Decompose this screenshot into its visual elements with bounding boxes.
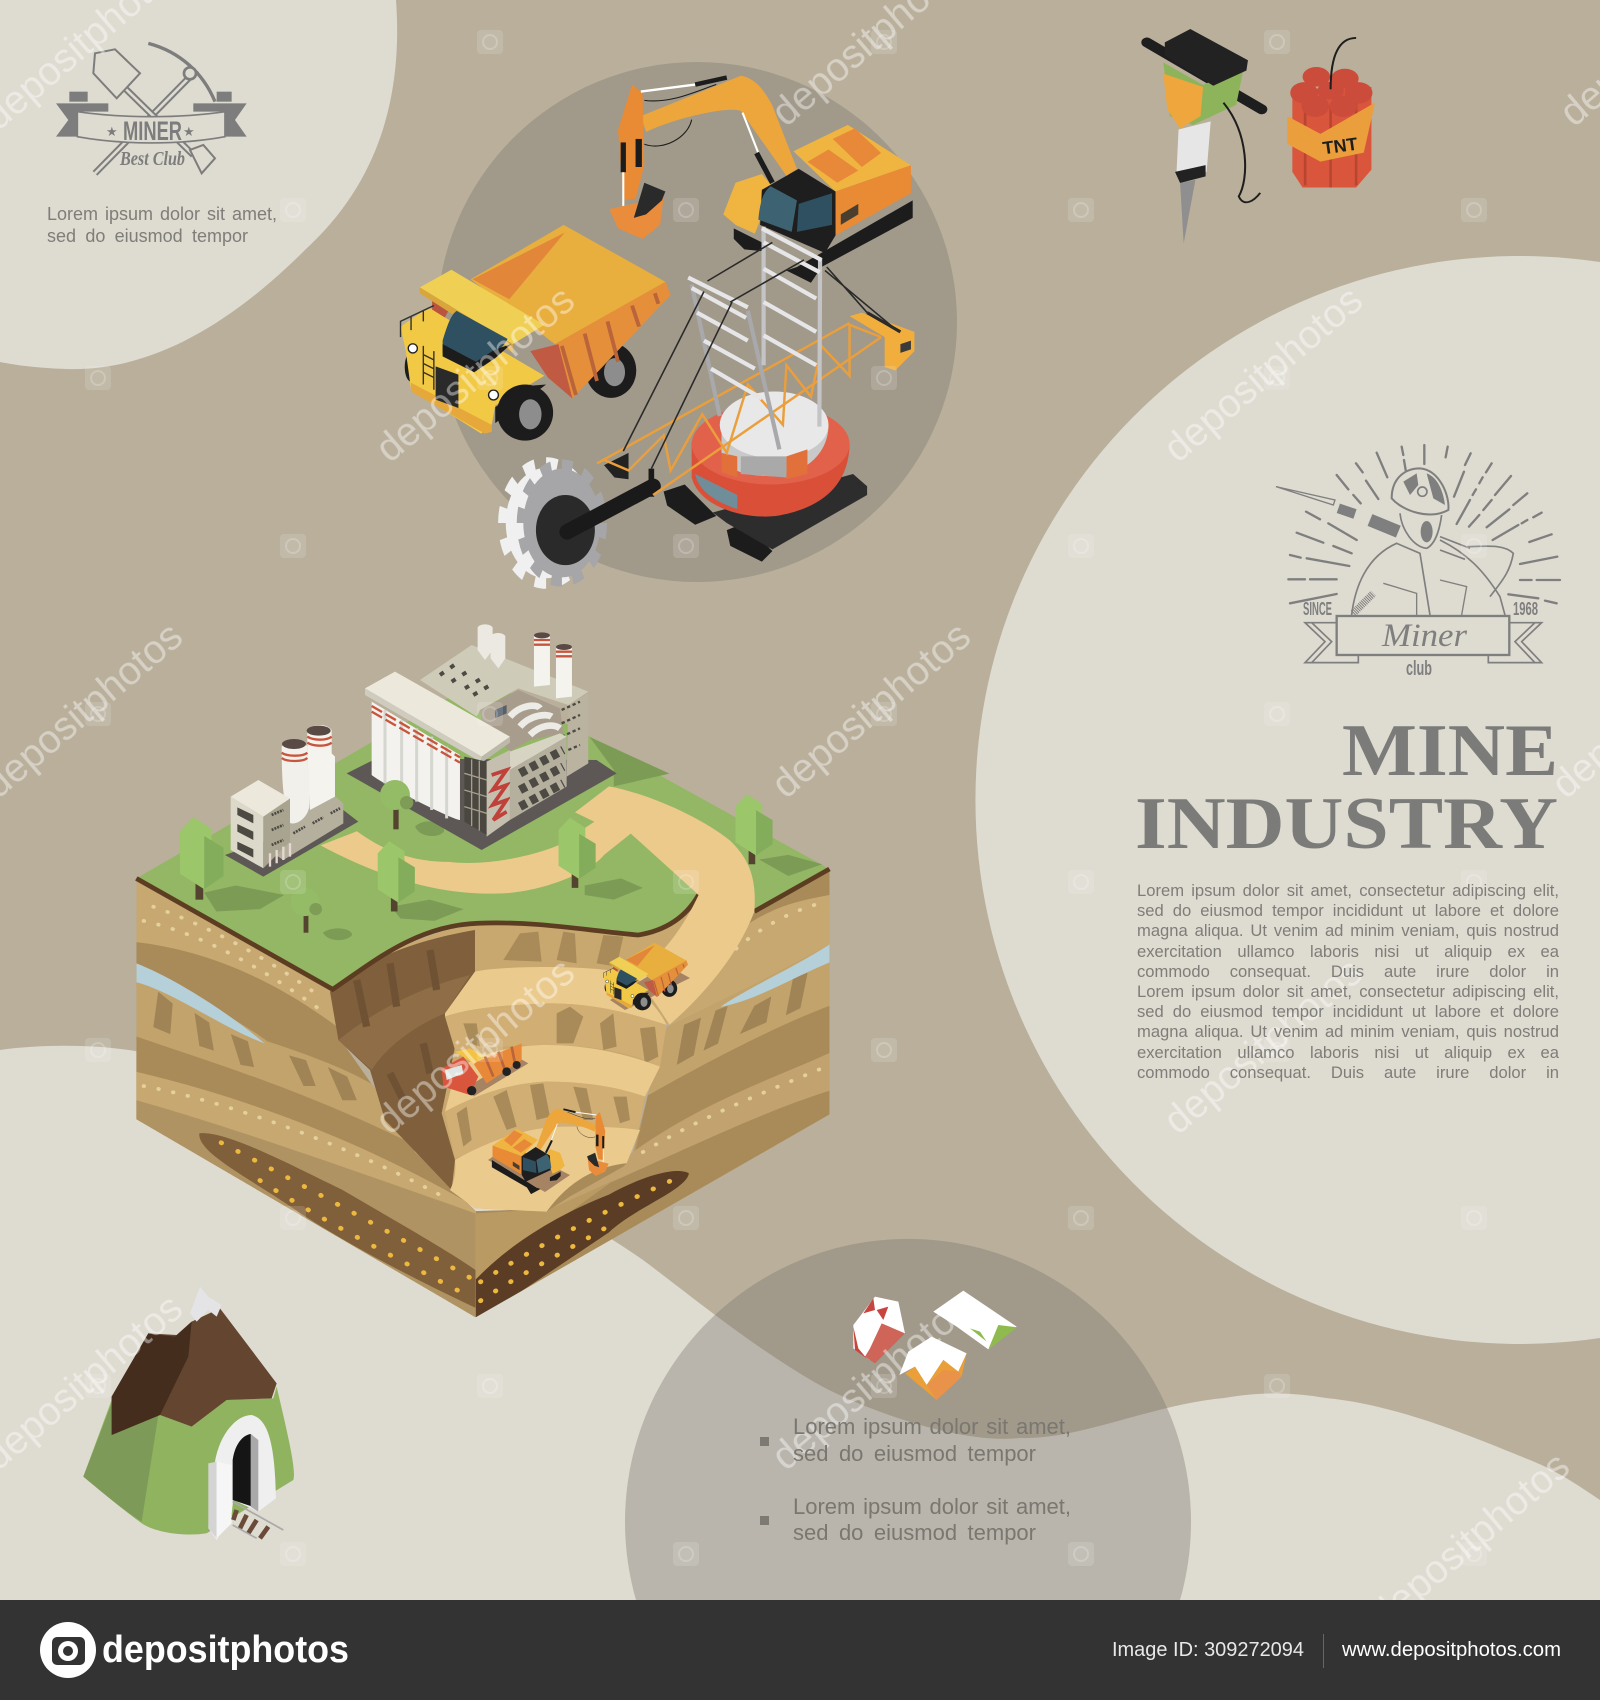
text block: main paragraph: sed do eiusmod tempor incididunt ut labore et dolore <box>1137 901 1559 920</box>
panel: machinery circle <box>437 62 957 582</box>
ruby <box>853 1297 905 1363</box>
trees <box>180 794 773 933</box>
icon: jackhammer <box>1147 29 1262 243</box>
text block: bullet one: Lorem ipsum dolor sit amet, <box>793 1414 1071 1439</box>
footer separator <box>1323 1634 1324 1668</box>
footer logo icon <box>40 1622 96 1678</box>
small excavator <box>488 1109 609 1194</box>
text block: bullet two: sed do eiusmod tempor <box>793 1520 1036 1545</box>
red haul truck <box>442 1043 528 1097</box>
watermarks: depositphotos <box>763 1286 979 1479</box>
text block: top-left lorem <box>47 204 277 246</box>
icon: tnt dynamite <box>1287 38 1375 187</box>
grass, road, trees <box>136 678 829 1025</box>
watermarks: depositphotos <box>1155 278 1371 471</box>
text block: main paragraph: commodo consequat. Duis aute irure dolor in <box>1137 962 1559 981</box>
text block: main paragraph: magna aliqua. Ut venim ad minim veniam, quis nostrud <box>1137 1022 1559 1041</box>
main title: industry: INDUSTRY <box>1135 783 1558 865</box>
watermarks: depositphotos <box>367 278 583 471</box>
grass surface <box>136 678 829 989</box>
main title: mine: MINE <box>1342 710 1558 792</box>
icon: bucket wheel excavator <box>504 227 914 581</box>
gear wheel <box>504 466 602 581</box>
black arm <box>567 453 653 532</box>
chart: isometric mine cross-section <box>129 624 832 1322</box>
camera watermark icons <box>85 30 1487 1566</box>
icon: mountain with tunnel <box>83 1287 294 1540</box>
grass edge <box>136 869 829 989</box>
crawler tracks <box>664 484 772 562</box>
icon: excavator <box>609 76 913 283</box>
footer image id: Image ID: 309272094 <box>1112 1639 1304 1661</box>
footer bar <box>0 1600 1600 1700</box>
soil faces <box>129 864 832 1322</box>
text block: bullet one: sed do eiusmod tempor <box>793 1441 1036 1466</box>
panel: bottom light wave <box>0 1046 1600 1700</box>
text block: bullet one <box>793 1414 1071 1466</box>
factories <box>225 624 617 877</box>
text block: main paragraph: exercitation ullamco laboris nisi ut aliquip ex ea <box>1137 1043 1559 1062</box>
text block: main paragraph: sed do eiusmod tempor incididunt ut labore et dolore <box>1137 1002 1559 1021</box>
dark base <box>713 474 867 549</box>
badge text: miner script: Miner <box>1381 618 1467 654</box>
badge text: club: club <box>1406 658 1432 680</box>
white turret <box>720 392 829 479</box>
text block: main paragraph <box>1137 881 1559 1082</box>
badge star left: ★ <box>106 125 118 140</box>
watermarks: depositphotos <box>1362 1444 1578 1637</box>
footer url: www.depositphotos.com <box>1341 1639 1561 1661</box>
topaz <box>899 1337 967 1400</box>
bullet two <box>760 1516 769 1525</box>
emerald <box>933 1291 1017 1349</box>
text block: top-left lorem: Lorem ipsum dolor sit amet, <box>47 204 277 224</box>
ladder masts <box>688 227 821 449</box>
watermarks: depositphotos <box>763 614 979 807</box>
counterweight <box>850 313 914 370</box>
main factory <box>347 624 617 850</box>
badge text: best club: Best Club <box>119 148 185 170</box>
badge text: since: SINCE <box>1303 599 1332 619</box>
badge text: miner: MINER <box>123 116 182 146</box>
icon: dump truck <box>401 225 671 441</box>
icon: miner best club badge <box>56 43 247 173</box>
text block: main paragraph: commodo consequat. Duis aute irure dolor in <box>1137 1063 1559 1082</box>
badge star right: ★ <box>183 125 195 140</box>
text block: top-left lorem: sed do eiusmod tempor <box>47 226 248 246</box>
small factory <box>225 725 358 877</box>
footer logo text: depositphotos <box>102 1629 349 1671</box>
red base <box>692 404 850 517</box>
bullet one <box>760 1437 769 1446</box>
text block: main paragraph: exercitation ullamco laboris nisi ut aliquip ex ea <box>1137 942 1559 961</box>
round tree near silos <box>380 780 413 829</box>
icon: gems <box>853 1291 1017 1400</box>
text block: bullet two: Lorem ipsum dolor sit amet, <box>793 1494 1071 1519</box>
badge text: year: 1968 <box>1513 599 1538 619</box>
tnt label: TNT <box>1321 134 1359 158</box>
text block: bullet two <box>793 1494 1071 1545</box>
text block: main paragraph: Lorem ipsum dolor sit amet, consectetur adipiscing elit, <box>1137 982 1559 1001</box>
grass shadows <box>204 737 822 940</box>
icon: miner club badge <box>1276 445 1560 663</box>
open pit <box>330 900 757 1212</box>
yellow truss boom <box>597 323 881 495</box>
text block: main paragraph: magna aliqua. Ut venim ad minim veniam, quis nostrud <box>1137 921 1559 940</box>
small dump truck <box>603 943 690 1010</box>
dirt road <box>321 786 755 1025</box>
watermarks: depositphotos <box>367 950 583 1143</box>
text block: main paragraph: Lorem ipsum dolor sit amet, consectetur adipiscing elit, <box>1137 881 1559 900</box>
watermarks: depositphotos <box>1155 950 1371 1143</box>
panel: right large circle <box>975 256 1600 1344</box>
cables <box>623 242 899 469</box>
panel: top-left light blob <box>0 0 397 369</box>
panel: gems circle <box>625 1239 1191 1600</box>
